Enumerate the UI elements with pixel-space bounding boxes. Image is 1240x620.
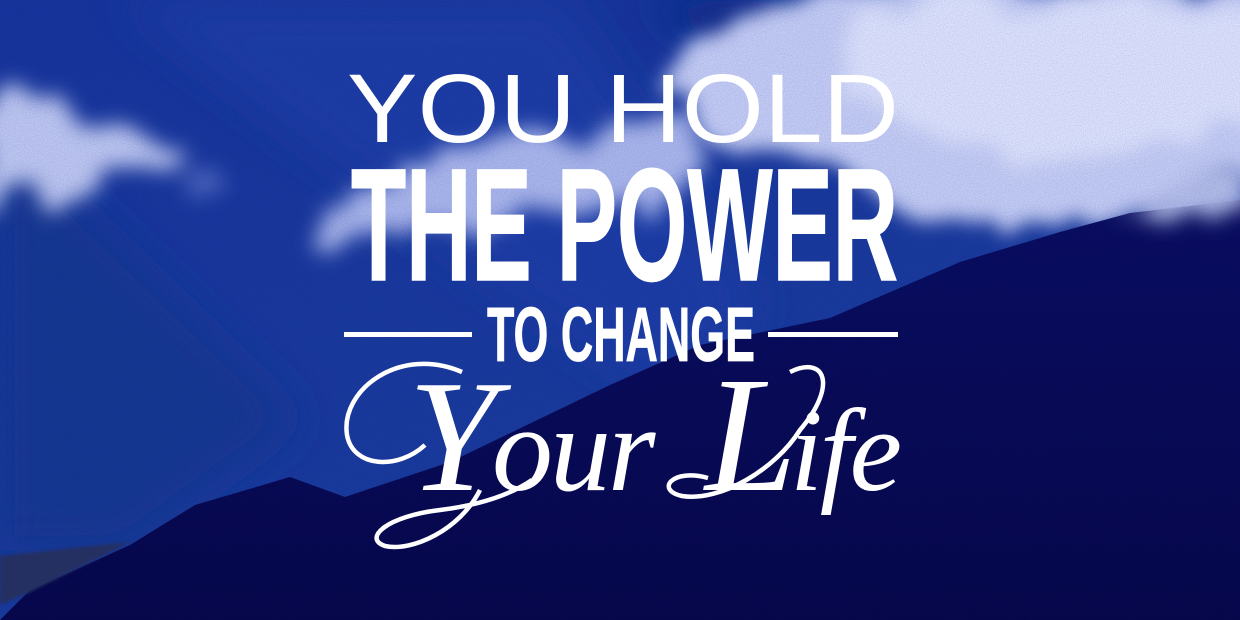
- cloud: left wisp: [0, 89, 230, 205]
- title line 3: TO CHANGE with side rules: TO CHANGE: [487, 292, 755, 378]
- title line 4: Your Life in script: L: [703, 343, 797, 526]
- mountain: dark foreground ridge: [0, 158, 1240, 620]
- title line 1: YOU HOLD: YOU HOLD: [347, 54, 899, 163]
- cloud: centre wisps behind the title: [310, 116, 704, 244]
- title line 4: Your Life in script: our: [492, 382, 656, 517]
- title line 4: Your Life in script: [346, 343, 900, 547]
- title line 3: TO CHANGE with side rules: [344, 292, 898, 378]
- cloud: large upper right: [660, 0, 1240, 231]
- title line 4: Your Life in script: ife: [790, 385, 900, 516]
- title line 4: Your Life in script: Y: [408, 347, 512, 525]
